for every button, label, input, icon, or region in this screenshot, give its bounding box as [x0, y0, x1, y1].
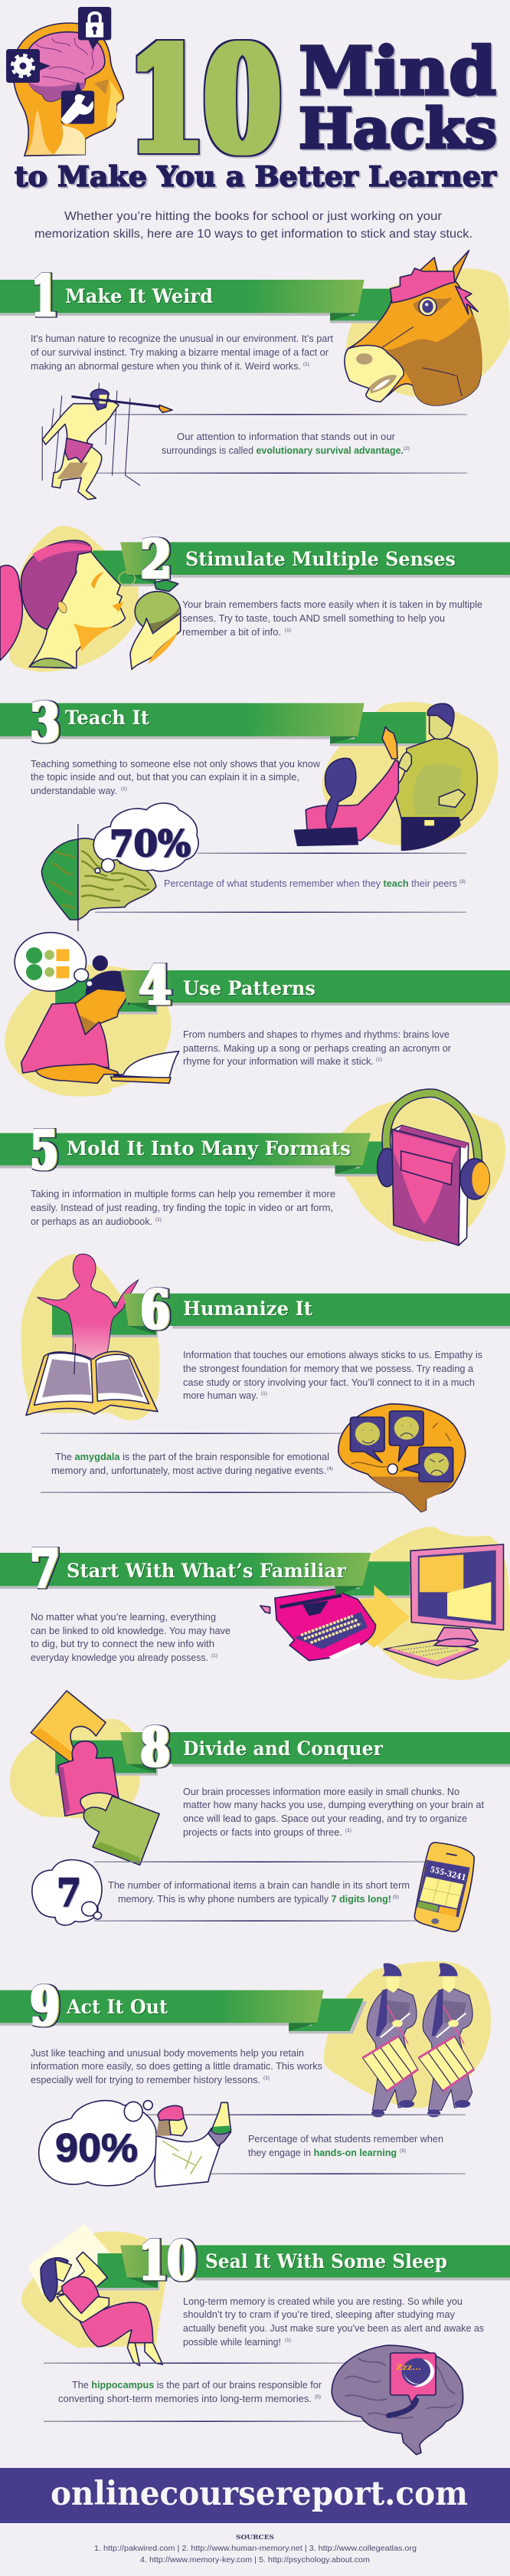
text block [183, 2296, 484, 2348]
sources: 1. http://pakwired.com | 2. http://www.human-memory.net | 3. http://www.collegeatlas.org [94, 2544, 417, 2553]
text block [31, 1612, 230, 1663]
sources [94, 2534, 417, 2565]
text block: actually benefit you. Just make sure you’ve been as alert and awake as [183, 2323, 484, 2334]
callout text: they engage in hands-on learning [248, 2148, 397, 2158]
callout text: (3) [459, 879, 466, 884]
text block: possible while learning! [183, 2337, 281, 2348]
callout text: surroundings is called evolutionary survival advantage. [162, 445, 404, 456]
callout text: The amygdala is the part of the brain responsible for emotional [55, 1452, 329, 1462]
icon: gear badge [6, 49, 51, 83]
icon: woman smelling apple [0, 526, 181, 672]
number 1: 1 [32, 264, 57, 330]
text block: (1) [263, 2076, 270, 2081]
heading: Start With What’s Familiar [67, 1560, 347, 1582]
text block: or perhaps as an audiobook. [31, 1216, 152, 1227]
callout text: (3) [400, 2148, 406, 2154]
number 9: 9 [31, 1974, 60, 2038]
callout text [108, 1880, 410, 1905]
number 10: 10 [139, 2229, 196, 2292]
intro text [34, 210, 472, 241]
heading: Stimulate Multiple Senses [185, 548, 456, 570]
text block: (1) [211, 1653, 217, 1659]
title: Hacks: Hacks [299, 96, 497, 161]
panel: 6 Humanize It [21, 1254, 510, 1512]
panel: 3 Teach It [0, 691, 499, 931]
callout text [51, 1452, 333, 1476]
icon: thought cloud [32, 1860, 102, 1925]
icon: horse head [330, 251, 510, 405]
callout text: converting short-term memories into long-term memories. [58, 2394, 312, 2404]
heading: Teach It [65, 707, 149, 729]
icon: caveman with spear [42, 383, 172, 500]
callout text: memory. This is why phone numbers are typically 7 digits long! [118, 1894, 391, 1905]
ribbon: Humanize It [123, 1294, 510, 1329]
text block: (1) [121, 786, 127, 792]
panel: 2 Stimulate Multiple Senses [0, 526, 510, 672]
text block: case study or story involving your fact. You’ll connect to it in a much [183, 1377, 475, 1388]
heading: Divide and Conquer [183, 1738, 384, 1760]
text block: can be linked to old knowledge. You may have [31, 1626, 230, 1636]
text block: remember a bit of info. [182, 627, 281, 638]
panel: 7 Start With What's Familiar [0, 1527, 510, 1680]
number 7: 7 [31, 1537, 60, 1600]
icon: sleeping brain [332, 2345, 463, 2455]
stat: 70%: 70% [110, 823, 191, 865]
text block: especially well for trying to remember history lessons. [31, 2075, 260, 2085]
heading: Seal It With Some Sleep [205, 2250, 447, 2272]
panel: 1 Make It Weird [0, 251, 510, 500]
callout rules [145, 2114, 466, 2174]
number 8: 8 [141, 1715, 170, 1779]
text block: matter how many hacks you use, dumping everything on your brain at [183, 1800, 485, 1810]
text block: Just like teaching and unusual body movements help you retain [31, 2048, 304, 2059]
icon: scientist with flask and thought cloud [39, 2101, 231, 2187]
stat: 90%: 90% [55, 2126, 138, 2171]
text block: Our brain processes information more easily in small chunks. No [183, 1787, 459, 1797]
sources: 4. http://www.memory-key.com | 5. http://psychology.about.com [140, 2555, 370, 2565]
text block: (1) [285, 2338, 291, 2343]
callout text: (2) [404, 446, 410, 451]
intro text: Whether you’re hitting the books for school or just working on your [64, 210, 442, 223]
text block: (1) [285, 628, 291, 633]
icon: puzzle pieces [10, 1691, 159, 1865]
text block: the strongest foundation for memory that we possess. Try reading a [183, 1363, 473, 1374]
text block [31, 759, 321, 796]
text block: (1) [261, 1391, 267, 1396]
header panel [6, 7, 497, 241]
icon: half green brain with thought bubble [41, 803, 198, 931]
callout text: (5) [393, 1895, 399, 1900]
icon: brain with emotion faces [338, 1404, 466, 1512]
ribbon: Use Patterns [120, 970, 510, 1006]
callout text: Percentage of what students remember when they teach their peers [164, 878, 457, 889]
icon: teacher and student [294, 702, 499, 850]
ribbon: Make It Weird [0, 280, 365, 320]
stat: 7: 7 [57, 1870, 81, 1915]
ribbon: Seal It With Some Sleep [120, 2245, 510, 2280]
text block: patterns. Making up a song or perhaps creating an acronym or [183, 1043, 451, 1054]
ribbon: Teach It [0, 703, 365, 744]
icon: sleeping brain: Zzz... [396, 2364, 421, 2372]
text block: From numbers and shapes to rhymes and rhythms: brains love [183, 1029, 450, 1040]
callout text: Percentage of what students remember when [248, 2134, 443, 2144]
heading: Mold It Into Many Formats [67, 1137, 351, 1160]
icon: phone [414, 1843, 474, 1931]
ribbon: Mold It Into Many Formats [0, 1133, 371, 1174]
icon: sleeping woman [21, 2224, 168, 2366]
text block [31, 2048, 322, 2085]
number 5: 5 [31, 1118, 58, 1182]
number 2: 2 [141, 527, 172, 591]
text block: No matter what you’re learning, everything [31, 1612, 216, 1623]
text block: once will lead to gaps. Space out your reading, and try to organize [183, 1813, 467, 1824]
heading: Use Patterns [183, 977, 315, 999]
text block [182, 599, 482, 638]
heading: Make It Weird [65, 285, 213, 307]
text block: (1) [376, 1057, 382, 1062]
text block: everyday knowledge you already possess. [31, 1652, 208, 1663]
panel: 9 Act It Out [0, 1961, 491, 2187]
icon: typewriter and computer [260, 1527, 510, 1680]
icon: figure rising from open book [21, 1254, 159, 1420]
callout text [58, 2380, 322, 2404]
text block: senses. Try to taste, touch AND smell something to help you [182, 613, 445, 624]
icon: wrench badge [61, 81, 94, 124]
number 4: 4 [139, 953, 172, 1017]
number 3: 3 [31, 691, 60, 754]
text block: Long-term memory is created while you are resting. So while you [183, 2296, 463, 2307]
icon: lock badge [78, 7, 111, 50]
subtitle: to Make You a Better Learner [15, 161, 497, 193]
text block: Information that touches our emotions always sticks to us. Empathy is [183, 1350, 482, 1360]
sources: SOURCES [236, 2534, 274, 2542]
intro text: memorization skills, here are 10 ways to get information to stick and stay stuck. [34, 228, 472, 241]
text block: projects or facts into groups of three. [183, 1827, 342, 1838]
ribbon: Act It Out [0, 1990, 324, 2031]
callout text: (4) [327, 1466, 333, 1472]
icon: head with brain [13, 23, 123, 156]
number 6: 6 [141, 1278, 170, 1341]
icon: phone: 555-3241 [429, 1865, 467, 1883]
callout rules [95, 852, 466, 913]
callout text: The hippocampus is the part of our brains responsible for [72, 2380, 322, 2391]
panel: 4 Use Patterns [5, 933, 510, 1097]
ribbon: Stimulate Multiple Senses [120, 542, 510, 578]
panel: 5 Mold It Into Many Formats [0, 1093, 505, 1245]
title: Mind: Mind [299, 33, 496, 110]
callout rules [96, 414, 467, 474]
text block: It’s human nature to recognize the unusual in our environment. It’s part [31, 333, 334, 344]
text block [183, 1350, 482, 1401]
callout text: memory and, unfortunately, most active during negative events. [51, 1465, 326, 1476]
ribbon: Divide and Conquer [120, 1732, 510, 1767]
icon: woman reading [5, 933, 179, 1097]
text block: Your brain remembers facts more easily when it is taken in by multiple [182, 599, 482, 610]
text block: to dig, but try to connect the new info with [31, 1639, 214, 1649]
text block: making an abnormal gesture when you think of it. Weird works. [31, 361, 301, 372]
text block: (1) [303, 362, 309, 367]
callout text [162, 432, 410, 456]
callout rules [41, 1433, 408, 1493]
text block: Taking in information in multiple forms can help you remember it more [31, 1189, 335, 1199]
footer site name: onlinecoursereport.com [51, 2475, 468, 2513]
text block [31, 333, 334, 372]
text block: the topic inside and out, but that you can explain it in a simple, [31, 772, 299, 783]
heading: Act It Out [66, 1996, 168, 2018]
icon: book with headphones [335, 1093, 505, 1245]
text block: information more easily, so does getting a little dramatic. This works [31, 2061, 322, 2072]
text block [183, 1029, 451, 1067]
ribbon: Start With What's Familiar [0, 1553, 371, 1596]
callout text: Our attention to information that stands out in our [177, 432, 395, 442]
callout text: (5) [315, 2394, 321, 2400]
text block: shouldn’t try to cram if you’re tired, sleeping after studying may [183, 2309, 456, 2320]
text block: more human way. [183, 1390, 258, 1401]
text block: Teaching something to someone else not only shows that you know [31, 759, 321, 770]
callout text [248, 2134, 443, 2158]
icon: drummers [289, 1961, 491, 2117]
panel: 8 Divide and Conquer [10, 1691, 510, 1931]
text block: easily. Instead of just reading, try finding the topic in video or art form, [31, 1203, 333, 1213]
title: 10: 10 [129, 15, 280, 185]
text block: understandable way. [31, 786, 117, 796]
panel: 10 Seal It With Some Sleep [21, 2224, 510, 2455]
heading: Humanize It [183, 1298, 312, 1320]
callout rules [94, 1861, 427, 1921]
text block: (1) [155, 1217, 162, 1222]
callout text: The number of informational items a brain can handle in its short term [108, 1880, 410, 1891]
text block: (1) [345, 1828, 351, 1833]
footer band [0, 2468, 510, 2523]
text block: rhyme for your information will make it stick. [183, 1056, 374, 1067]
text block [31, 1189, 335, 1227]
callout rules [44, 2362, 365, 2422]
text block: of our survival instinct. Try making a bizarre mental image of a fact or [31, 347, 329, 358]
text block [183, 1787, 485, 1838]
